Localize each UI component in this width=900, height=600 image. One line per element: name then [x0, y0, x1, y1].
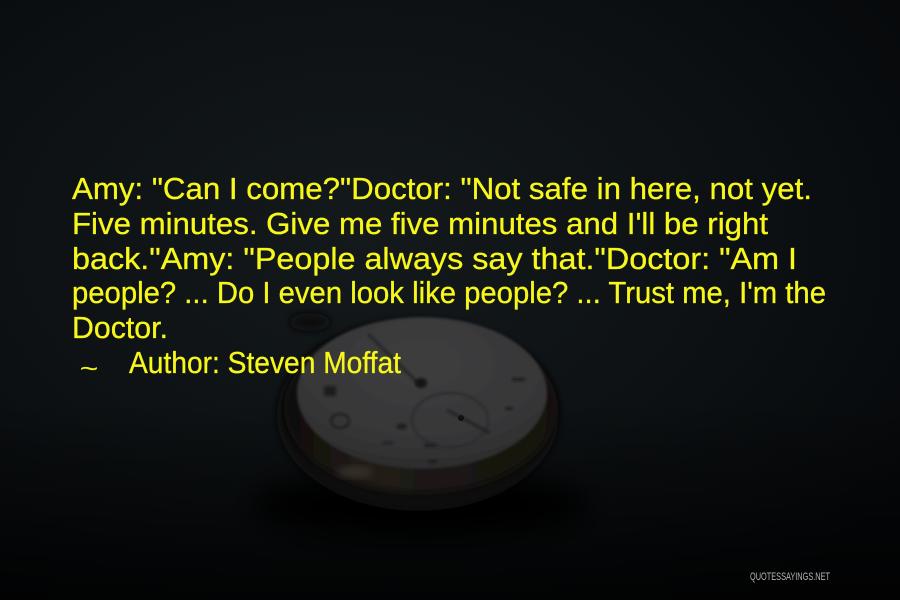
watermark: QUOTESSAYINGS.NET: [750, 571, 830, 583]
quote text: Doctor.: [72, 310, 168, 345]
quote text: back."Amy: "People always say that."Doctor: "Am I: [72, 241, 797, 276]
pocket watch photo: [250, 313, 590, 540]
quote text: Amy: "Can I come?"Doctor: "Not safe in here, not yet.: [72, 171, 812, 206]
author attribution: Author: Steven Moffat: [129, 345, 401, 380]
author attribution: ~: [80, 356, 98, 381]
quote text: [72, 171, 826, 345]
quote text: Five minutes. Give me five minutes and I'll be right: [72, 206, 768, 241]
quote text: people? ... Do I even look like people? ... Trust me, I'm the: [72, 275, 826, 310]
